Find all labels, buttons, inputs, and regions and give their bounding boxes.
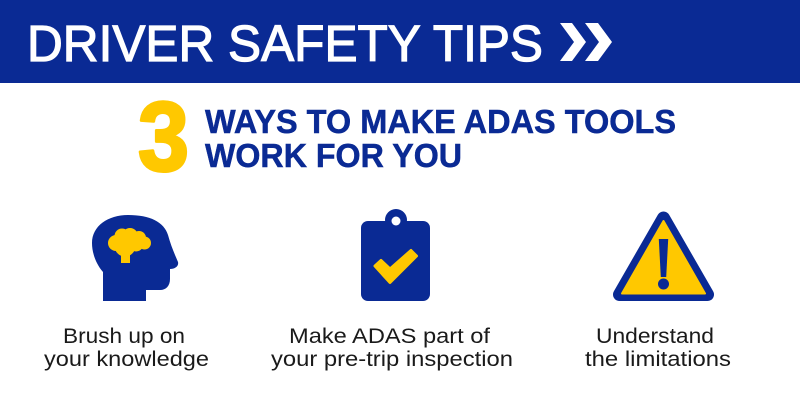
panel: understand the limitations <box>585 218 731 371</box>
label: Make ADAS part of <box>289 325 490 348</box>
large number 3: 3 <box>138 82 189 192</box>
icon: head with brain <box>92 215 178 301</box>
header title: DRIVER SAFETY TIPS <box>27 15 543 72</box>
panel: make ADAS part of your pre-trip inspection <box>271 209 513 371</box>
heading line 1: WAYS TO MAKE ADAS TOOLS <box>205 103 676 140</box>
heading: 3 ways to make ADAS tools work for you <box>138 82 676 192</box>
heading line 2: WORK FOR YOU <box>205 137 462 174</box>
header banner <box>0 0 800 83</box>
panel: brush up on your knowledge <box>44 215 209 371</box>
label: your knowledge <box>44 348 209 371</box>
label: the limitations <box>585 348 731 371</box>
label: your pre-trip inspection <box>271 348 513 371</box>
icon: warning triangle <box>620 218 708 294</box>
label: Understand <box>596 325 714 348</box>
icon: clipboard with check <box>361 209 430 301</box>
label: Brush up on <box>63 325 185 348</box>
icon: double chevron arrows <box>560 23 612 61</box>
